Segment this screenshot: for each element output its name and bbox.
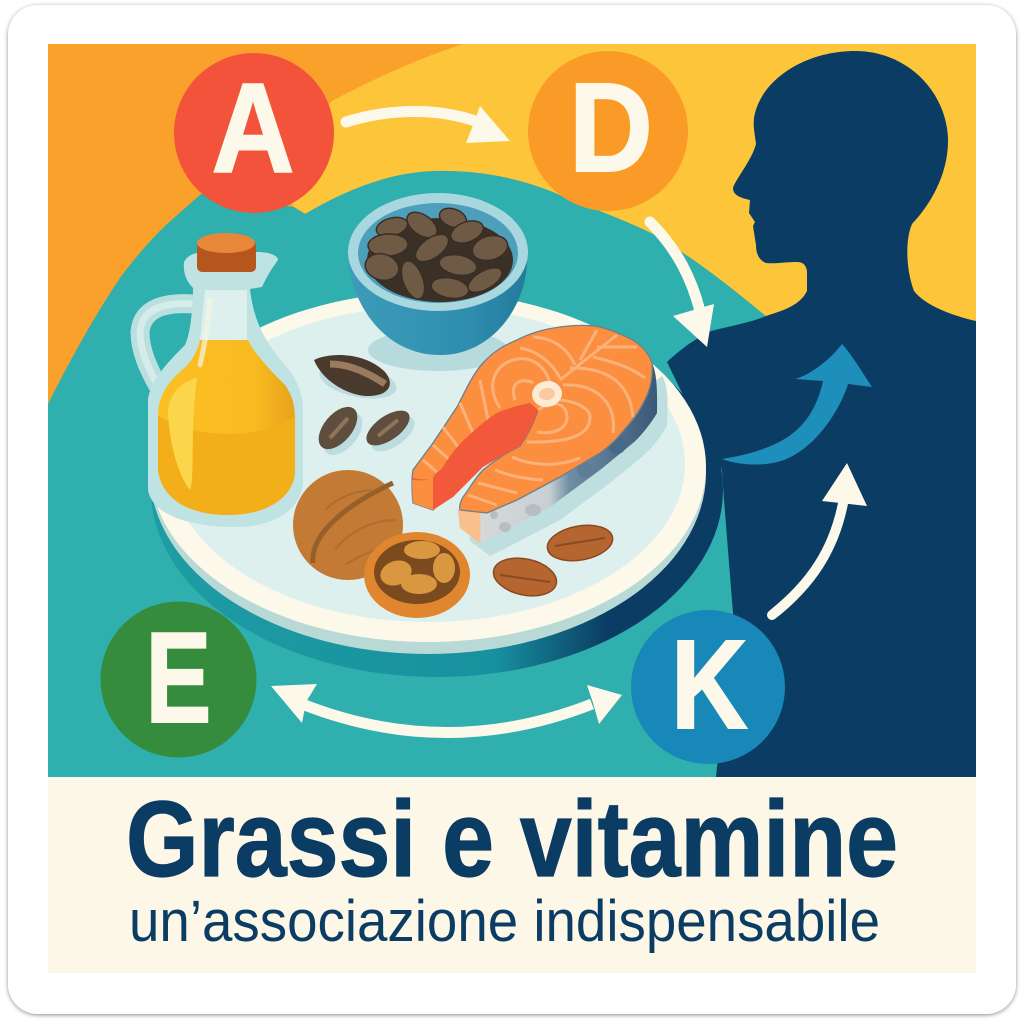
arrow: A to D (346, 106, 510, 143)
bottom text band (48, 777, 976, 973)
arrow: inside body (722, 344, 872, 465)
arrow: D to body (650, 222, 714, 347)
vitamin D circle (528, 51, 688, 211)
vitamin K circle (631, 610, 785, 764)
vitamin K circle: K (671, 614, 747, 755)
vitamin E circle: E (146, 606, 211, 750)
loose seeds (311, 355, 420, 462)
arrow: K to body (772, 463, 867, 615)
vitamin E circle (100, 602, 256, 758)
illustration background (48, 44, 976, 777)
walnuts (293, 470, 470, 618)
plate (150, 292, 723, 677)
subtitle: un’associazione indispensabile (129, 889, 880, 954)
salmon steak (412, 326, 668, 556)
bowl of seeds (348, 193, 528, 371)
arrow: E and K double (271, 684, 622, 732)
vitamin A circle: A (212, 57, 294, 199)
vitamin D circle: D (569, 57, 653, 198)
body silhouette (667, 51, 976, 777)
almonds (490, 521, 615, 601)
oil bottle (148, 233, 303, 527)
bottle handle (140, 304, 194, 386)
vitamin A circle (174, 53, 334, 213)
title: Grassi e vitamine (126, 778, 898, 899)
